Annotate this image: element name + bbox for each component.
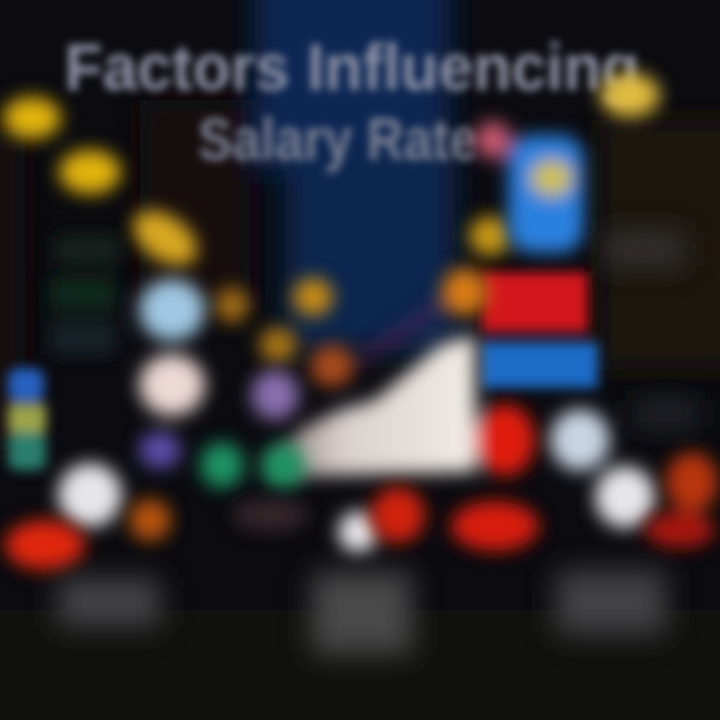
bar chart: red and blue bars [482, 272, 598, 388]
coins: yellow markers [3, 73, 660, 363]
title [64, 30, 640, 173]
white circles [58, 409, 655, 553]
icon: blue figure with pink badge [475, 121, 584, 253]
area chart: white rising area [270, 268, 535, 476]
legend strip: stacked colour swatches [8, 368, 46, 470]
bottom band [0, 610, 720, 720]
title: Factors Influencing [64, 30, 640, 104]
caption blocks [58, 232, 698, 654]
left column of icons [50, 235, 299, 469]
red glow shapes [5, 452, 718, 570]
background panels [0, 0, 720, 450]
title: Salary Rate [198, 106, 478, 173]
green markers [200, 442, 305, 489]
